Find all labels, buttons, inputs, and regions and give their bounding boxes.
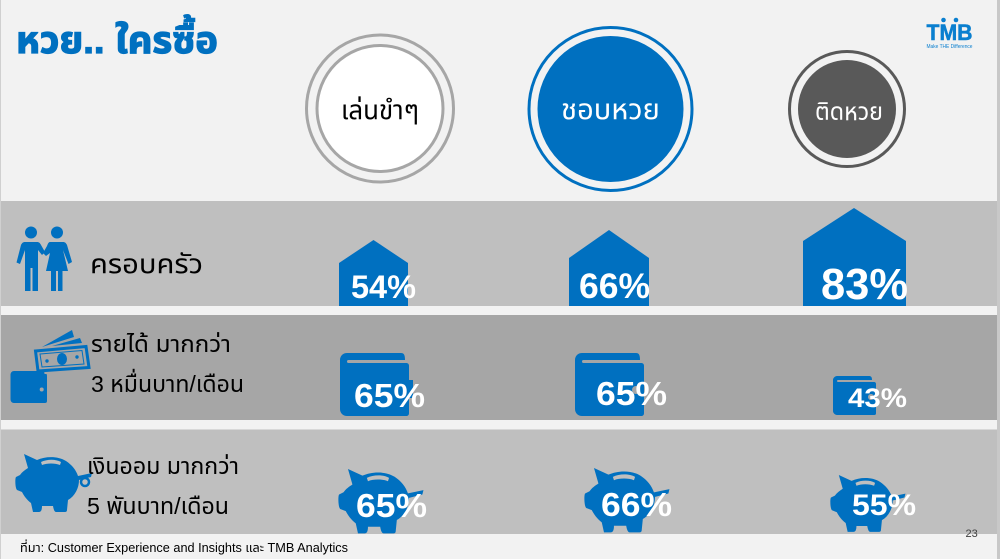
piggy: 66% column 2: 66% <box>601 486 672 523</box>
icon: money and wallet <box>10 330 89 403</box>
icon: couple <box>16 226 72 291</box>
label: income: 3 หมื่นบาท/เดือน <box>91 368 244 397</box>
label: family: ครอบครัว <box>90 249 203 279</box>
house: 66%: 66% <box>579 267 650 306</box>
wallet: 65% column 1: 65% <box>354 377 425 414</box>
title: หวย.. ใครซื้อ <box>16 14 218 61</box>
wallet: 43% column 3: 43% <box>848 383 907 413</box>
wallet: 65% column 2 <box>575 353 667 416</box>
circle: ชอบหวย: ชอบหวย <box>561 94 660 126</box>
logo: TMB: TMB <box>926 20 972 45</box>
circle: เล่นขำๆ: เล่นขำๆ <box>341 95 419 125</box>
panel: income row <box>1 315 997 420</box>
wallet: 65% column 1 <box>340 353 425 416</box>
piggy: 55% column 3 <box>830 475 916 532</box>
circle: ชอบหวย <box>529 28 692 190</box>
house: 66% <box>569 230 650 306</box>
piggy: 66% column 2 <box>584 468 672 532</box>
circle: เล่นขำๆ <box>306 35 454 182</box>
circle: ติดหวย <box>790 52 904 166</box>
wallet: 43% column 3 <box>833 376 907 415</box>
piggy: 65% column 1: 65% <box>356 487 427 524</box>
house: 54% <box>339 240 416 306</box>
house: 83%: 83% <box>821 260 908 309</box>
label: income <box>91 331 244 397</box>
panel: family row <box>1 201 997 309</box>
logo: TMB: Make THE Difference <box>926 44 972 50</box>
house: 83% <box>803 208 908 309</box>
piggy: 65% column 1 <box>338 469 427 533</box>
label: income: รายได้ มากกว่า <box>91 331 231 357</box>
circle: ติดหวย: ติดหวย <box>815 98 883 126</box>
source note: ที่มา: Customer Experience and Insights และ TMB Analytics <box>20 539 348 555</box>
wallet: 65% column 2: 65% <box>596 375 667 412</box>
label: savings <box>87 453 239 519</box>
panel: savings row <box>1 430 997 534</box>
house: 54%: 54% <box>351 269 416 305</box>
page number: 23 <box>966 528 978 540</box>
icon: piggy bank <box>15 454 92 512</box>
label: savings: เงินออม มากกว่า <box>87 453 239 479</box>
piggy: 55% column 3: 55% <box>852 489 916 522</box>
label: savings: 5 พันบาท/เดือน <box>87 493 229 519</box>
